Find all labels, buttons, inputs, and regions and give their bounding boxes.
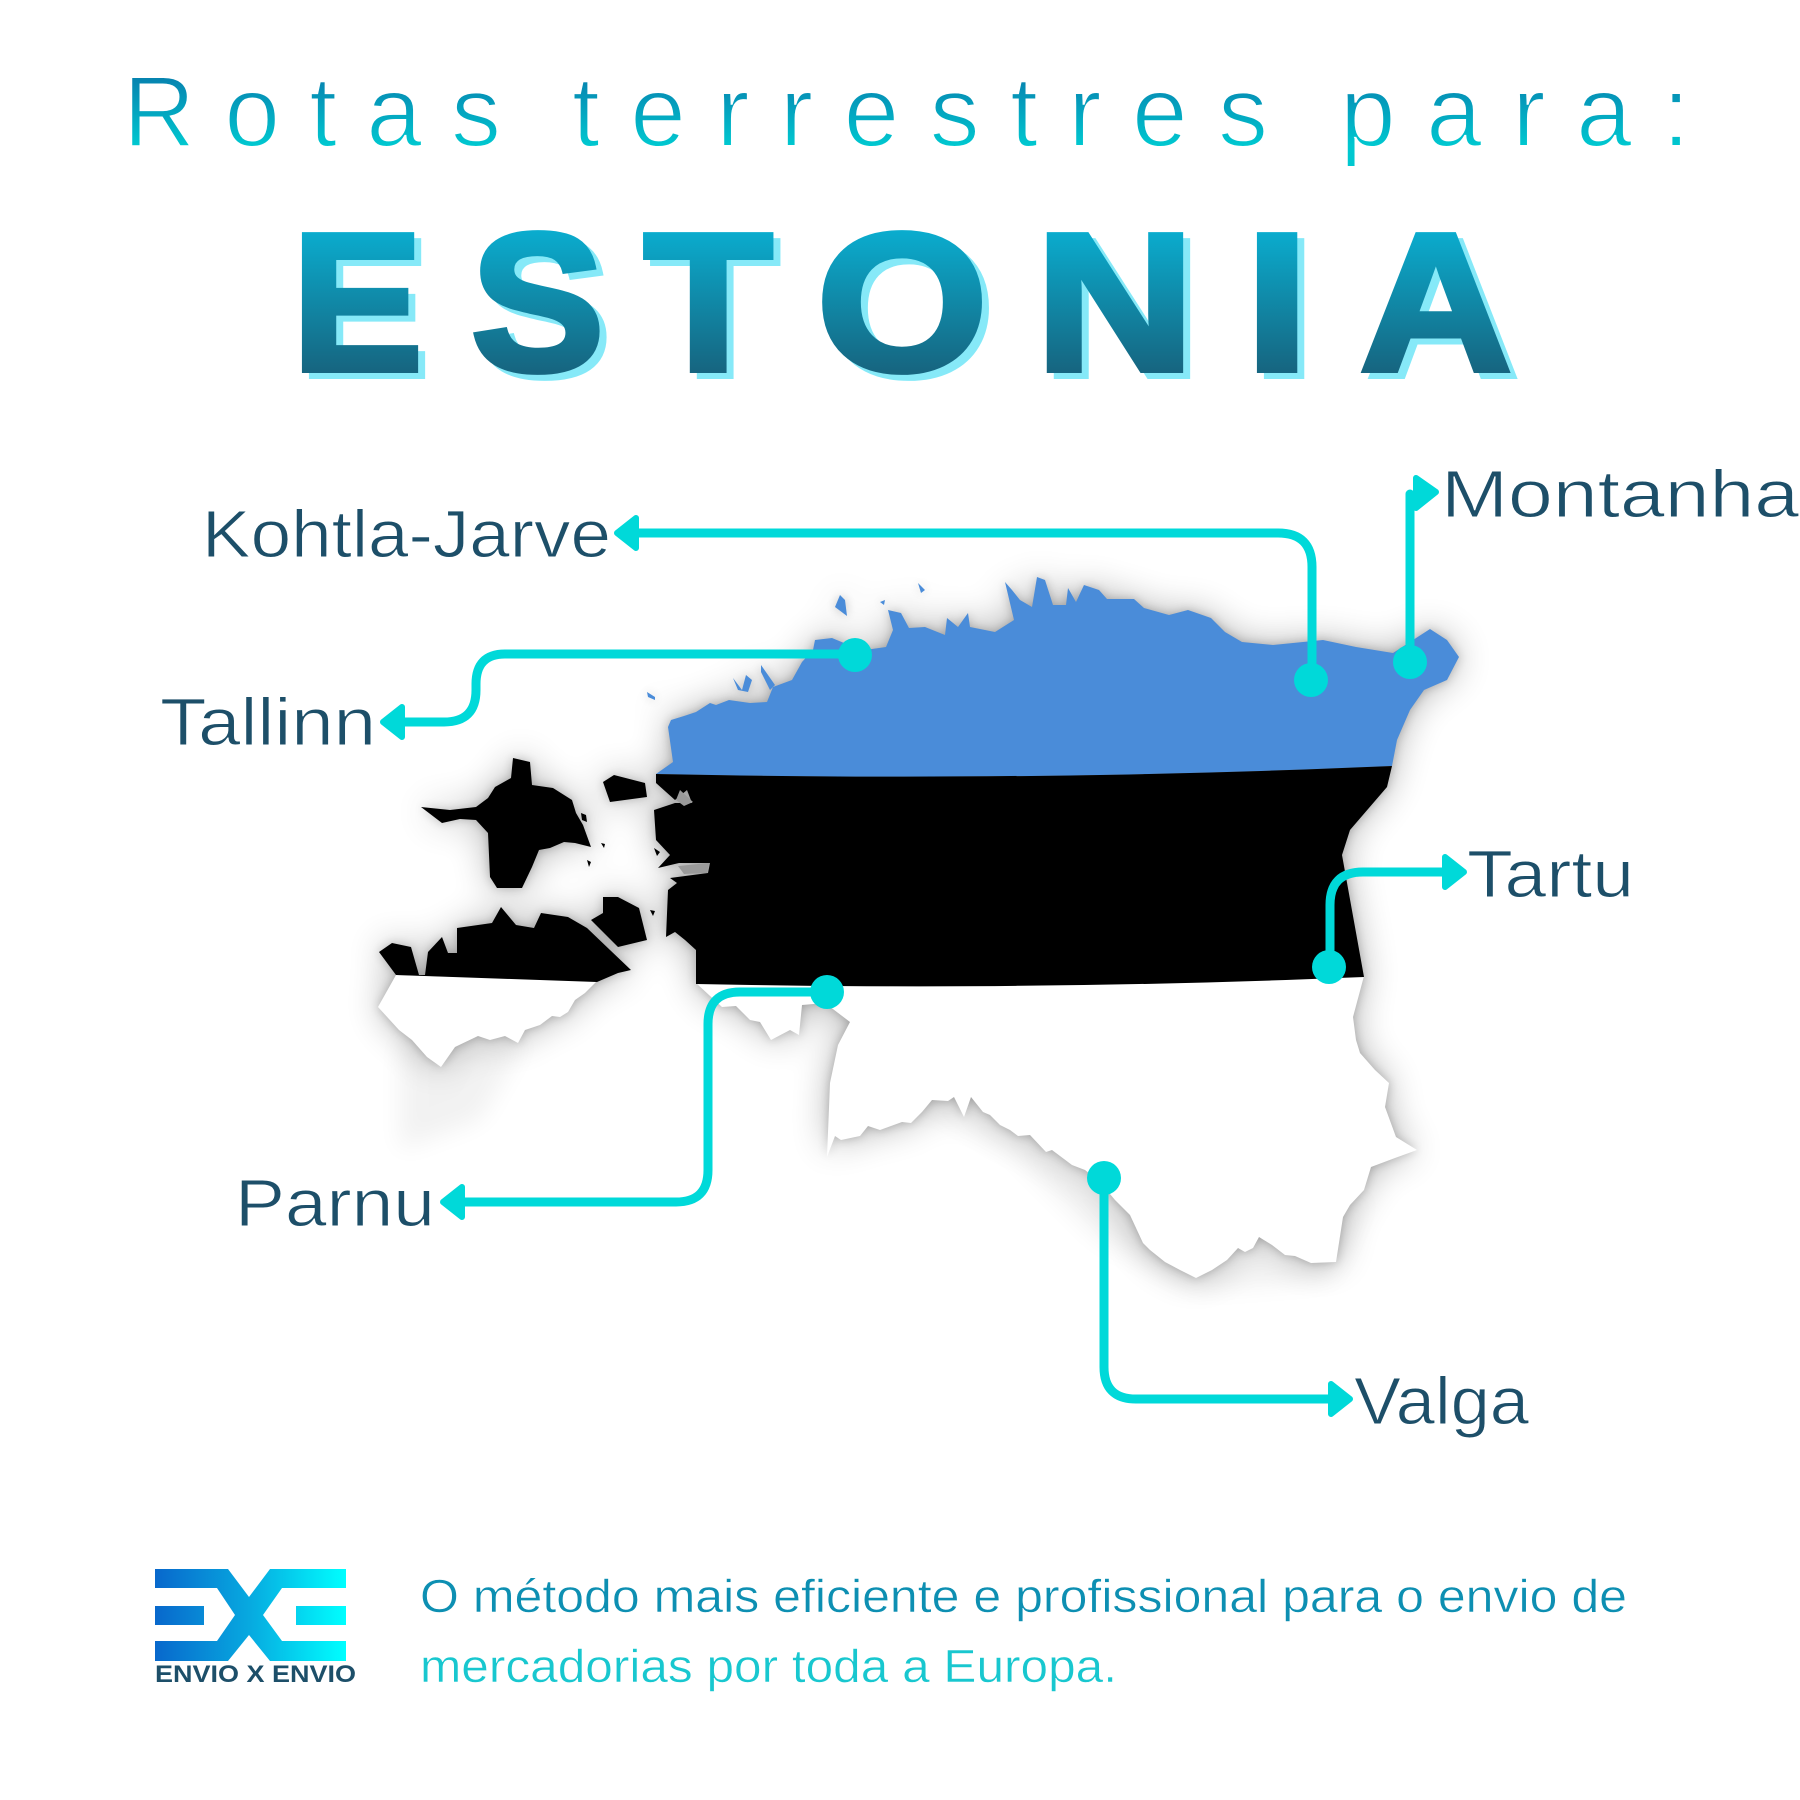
long soft shadow below the west coast bbox=[400, 1040, 1370, 1290]
arrowhead bbox=[1331, 1384, 1350, 1414]
route: Montanha bbox=[1393, 478, 1436, 679]
black band: Hiiumaa island bbox=[421, 758, 591, 888]
route: Valga bbox=[1087, 1161, 1350, 1414]
map of Estonia in flag colours bbox=[378, 577, 1459, 1278]
heading: ESTONIA: T bbox=[644, 194, 772, 412]
heading: ESTONIA: O bbox=[816, 193, 988, 412]
arrowhead bbox=[1445, 857, 1464, 887]
heading: ESTONIA: E bbox=[292, 192, 423, 412]
black band: Saaremaa island bbox=[379, 907, 631, 982]
black band: mainland bbox=[654, 766, 1392, 986]
heading: ESTONIA bbox=[292, 192, 1512, 412]
marker bbox=[810, 975, 844, 1009]
arrowhead bbox=[383, 707, 402, 737]
black band: Vormsi island bbox=[603, 775, 647, 802]
label: Kohtla-Jarve: Kohtla-Jarve bbox=[202, 497, 611, 572]
arrowhead bbox=[443, 1187, 462, 1217]
route: Tallinn bbox=[383, 638, 872, 737]
small black islets bbox=[581, 813, 660, 916]
label: Valga: Valga bbox=[1354, 1364, 1530, 1439]
tagline line 1: O método mais eficiente e profissional para o envio de bbox=[420, 1570, 1627, 1622]
label: Tallinn: Tallinn bbox=[160, 685, 376, 760]
marker bbox=[1312, 950, 1346, 984]
grey tips on the mainland peninsulas bbox=[676, 790, 709, 874]
white band: Saaremaa south bbox=[378, 975, 597, 1067]
blue band: northern mainland bbox=[656, 577, 1459, 777]
heading: ESTONIA: N bbox=[1035, 193, 1195, 412]
white band: southern mainland bbox=[696, 976, 1417, 1278]
blue islets off the north coast bbox=[647, 583, 925, 700]
arrowhead bbox=[1416, 478, 1436, 508]
marker bbox=[1087, 1161, 1121, 1195]
title: Rotas terrestres para bbox=[123, 56, 1690, 168]
heading: ESTONIA: I bbox=[1245, 193, 1309, 412]
logo mark bbox=[155, 1569, 346, 1661]
title: Rotas terrestres para: Rotas bbox=[123, 56, 501, 168]
label: Parnu: Parnu bbox=[235, 1166, 435, 1241]
route: Kohtla-Jarve bbox=[617, 518, 1328, 697]
black band: Muhu island bbox=[591, 897, 647, 947]
label: Tartu: Tartu bbox=[1467, 837, 1634, 912]
marker bbox=[838, 638, 872, 672]
logo: EXE Envio x Envio bbox=[155, 1569, 356, 1688]
marker bbox=[1393, 645, 1427, 679]
label: Montanha: Montanha bbox=[1441, 457, 1800, 532]
heading: ESTONIA: A bbox=[1360, 193, 1512, 412]
arrowhead bbox=[617, 518, 636, 548]
route: Tartu bbox=[1312, 857, 1464, 984]
logo wordmark: ENVIO X ENVIO bbox=[155, 1661, 356, 1688]
title: Rotas terrestres para: para: bbox=[1340, 56, 1690, 168]
marker bbox=[1294, 663, 1328, 697]
heading: ESTONIA: S bbox=[471, 193, 604, 412]
tagline line 2: mercadorias por toda a Europa. bbox=[420, 1640, 1117, 1692]
title: Rotas terrestres para: terrestres bbox=[572, 56, 1268, 168]
route: Parnu bbox=[443, 975, 844, 1217]
